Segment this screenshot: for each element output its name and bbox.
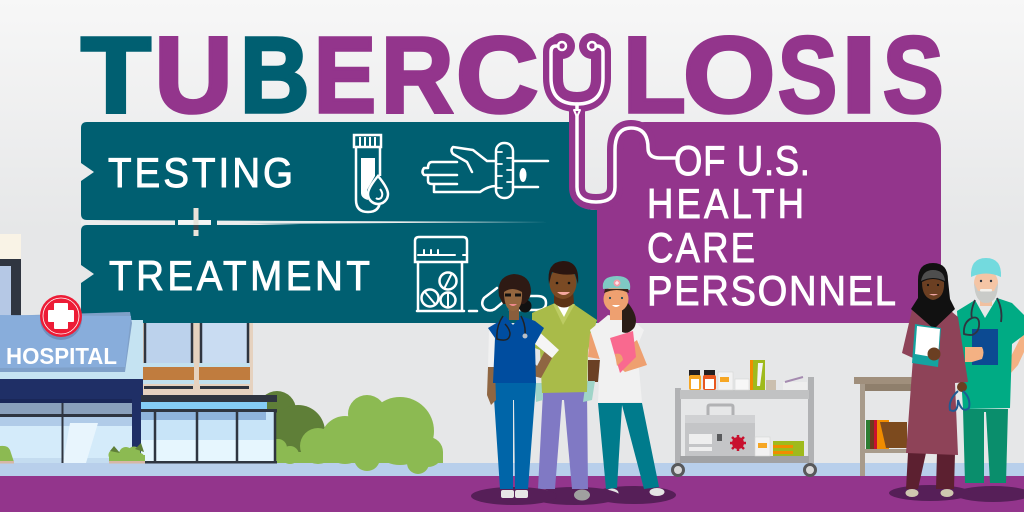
title: tuberculosis: E: [314, 14, 375, 135]
person: nurse legs: [592, 403, 676, 504]
plus sign: [175, 208, 217, 236]
icon: hand with skin test band: [422, 143, 548, 198]
title: tuberculosis: U: [154, 14, 232, 135]
title: tuberculosis: S: [778, 14, 837, 135]
bottles and supplies: [689, 360, 807, 390]
icon: pill bottle: [415, 237, 546, 311]
planter right: [108, 443, 145, 464]
person: nurse upper body: [588, 276, 647, 403]
planter left: [0, 446, 14, 464]
title: tuberculosis: B: [240, 14, 310, 135]
title: tuberculosis: [80, 14, 944, 135]
person: woman in hijab: [889, 263, 971, 501]
table with books: [854, 377, 916, 476]
bushes: [258, 391, 443, 474]
icon: stethoscope forming the U: [549, 33, 676, 202]
title: tuberculosis: L: [623, 14, 685, 135]
panel: testing and treatment: [81, 122, 597, 323]
title: tuberculosis: O: [683, 14, 775, 135]
title: tuberculosis: I: [841, 14, 877, 135]
building: hospital: [0, 234, 277, 464]
heading: of U.S. health care personnel: HEALTH: [647, 182, 804, 228]
person: man in green scrubs: [530, 261, 620, 505]
heading: treatment: TREATMENT: [109, 254, 370, 299]
heading: of U.S. health care personnel: PERSONNEL: [647, 269, 896, 314]
medical cart: [672, 360, 816, 476]
floor: [0, 463, 1024, 512]
icon: red cross badge: [40, 295, 82, 340]
first aid kit: [685, 405, 804, 456]
title: tuberculosis: C: [456, 14, 538, 135]
icon: test tube with drop: [354, 135, 388, 212]
panel: health care personnel: [597, 122, 941, 323]
person: surgeon: [955, 258, 1024, 502]
icon: capsules: [482, 288, 546, 310]
heading: of U.S. health care personnel: CARE: [647, 226, 755, 272]
heading: of U.S. health care personnel: OF U.S.: [674, 139, 810, 185]
heading: testing: TESTING: [108, 151, 293, 196]
title: tuberculosis: T: [81, 14, 151, 135]
title: tuberculosis: S: [883, 14, 944, 135]
heading: of U.S. health care personnel: [647, 139, 896, 314]
title: tuberculosis: R: [381, 14, 454, 135]
person: woman in navy scrubs: [471, 274, 559, 505]
sign text: hospital: HOSPITAL: [6, 343, 117, 369]
